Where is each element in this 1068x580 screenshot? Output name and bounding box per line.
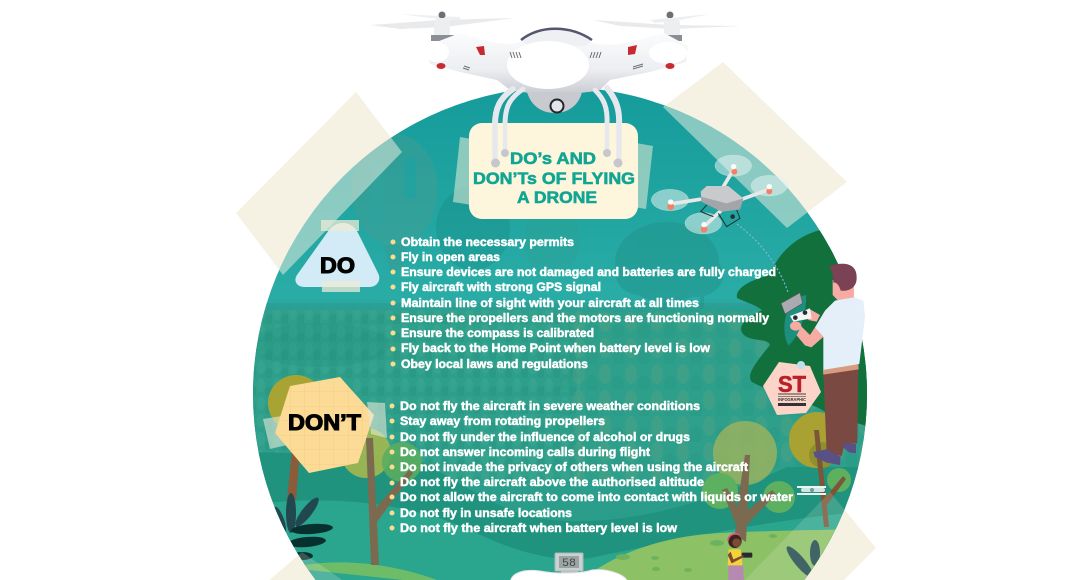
left propeller: [370, 12, 515, 41]
ST logo: ST: [778, 371, 806, 397]
grid: [275, 377, 374, 473]
shoes: [813, 443, 856, 465]
hill spots: [616, 534, 777, 572]
phone: [781, 293, 803, 314]
DON'T list: Do not fly the aircraft in severe weather conditions: [400, 399, 700, 413]
girl with controller: [728, 534, 752, 580]
trousers: [823, 365, 858, 456]
title: DO’s AND: [510, 149, 596, 168]
lower dark teal band: [250, 452, 880, 580]
leaf behind controller: [784, 295, 806, 345]
panel: title plate: [469, 123, 638, 219]
olive tree right: [789, 412, 851, 527]
canopy dark edge: [521, 29, 592, 40]
DON'T label: DON’T: [288, 410, 362, 435]
silhouette trees on horizon: [615, 222, 723, 310]
DON'T list: Do not answer incoming calls during flight: [400, 445, 650, 459]
INFOGRAPHIC label: INFOGRAPHIC: [778, 397, 807, 402]
neck and face: [833, 280, 854, 303]
hexagon: [763, 362, 821, 415]
hair: [829, 264, 857, 291]
screen panel: [559, 556, 579, 568]
DO list: Ensure the compass is calibrated: [401, 326, 594, 340]
horizon band: [264, 303, 762, 312]
light green tree left: [341, 428, 422, 565]
olive tree left: [268, 375, 314, 500]
DON'T list: [390, 399, 793, 535]
title: DON’Ts OF FLYING: [473, 169, 635, 188]
dark plant right: [786, 540, 820, 576]
DO list: Fly back to the Home Point when battery level is low: [401, 341, 711, 355]
icon: main drone: [370, 12, 742, 125]
DON'T list: Do not allow the aircraft to come into contact with liquids or water: [400, 490, 793, 504]
DON'T list: Do not invade the privacy of others when using the aircraft: [400, 460, 748, 474]
icon: flying drone: [651, 155, 788, 234]
body highlight: [507, 41, 589, 89]
pin: [797, 361, 805, 369]
olive-green tree centre right: [702, 421, 795, 542]
infographic canvas: [236, 12, 876, 580]
right tape: [367, 402, 387, 438]
hot air balloons: [352, 134, 510, 270]
rotors: [651, 155, 788, 234]
ST badge: [763, 361, 821, 415]
body: [701, 186, 743, 212]
DON'T list: Do not fly the aircraft above the authorised altitude: [400, 475, 704, 489]
DO list: Obtain the necessary permits: [401, 235, 574, 249]
lower light teal ground: [250, 500, 880, 580]
feet over plate: [491, 149, 622, 168]
DO badge: [295, 220, 379, 292]
tape top: [321, 220, 359, 231]
DO list: Fly aircraft with strong GPS signal: [401, 280, 601, 294]
legs: [701, 205, 740, 227]
sky and field gradient: [250, 85, 870, 580]
head: [728, 535, 742, 548]
remote: [742, 553, 752, 558]
trousers: [728, 565, 744, 580]
man with controller: [781, 264, 865, 465]
hexagon: [275, 377, 374, 473]
controller body: [510, 570, 628, 580]
tape bottom: [322, 281, 360, 292]
dome and lens: [527, 92, 582, 114]
stand: [561, 571, 578, 574]
icon: small drone over hill: [797, 486, 826, 495]
DO list: Fly in open areas: [401, 250, 500, 264]
DON'T badge: [263, 377, 387, 473]
title: [473, 149, 635, 207]
red lights: [436, 45, 674, 69]
vents: [463, 52, 643, 70]
left and right legs: [495, 88, 619, 125]
translucent tape over the circle: [236, 62, 876, 580]
dark plant left: [271, 493, 333, 560]
DO list: Maintain line of sight with your aircraft at all times: [401, 296, 699, 310]
right propeller: [593, 12, 742, 41]
ground controller: [510, 553, 628, 580]
DO list: Ensure devices are not damaged and batteries are fully charged: [401, 265, 776, 279]
left tape: [263, 416, 287, 449]
tape: outer parts behind the circle: [236, 62, 876, 580]
DO list: [390, 235, 776, 371]
right green hill: [596, 530, 836, 580]
shirt: [728, 549, 743, 565]
DO list: Ensure the propellers and the motors are functioning normally: [401, 311, 769, 325]
right arm: [792, 323, 827, 347]
hand: [790, 321, 801, 331]
canopy: [521, 29, 592, 46]
title: A DRONE: [517, 188, 597, 207]
triangle: [295, 223, 379, 287]
DON'T list: Do not fly the aircraft when battery level is low: [400, 521, 678, 535]
motor pods: [425, 42, 449, 62]
DON'T list: Do not fly under the influence of alcohol or drugs: [400, 430, 690, 444]
arms: [426, 33, 688, 94]
motors: [667, 169, 772, 233]
arms: [671, 170, 769, 227]
DO list: Obey local laws and regulations: [401, 357, 588, 371]
belt: [823, 364, 859, 375]
dotted flight line: [737, 224, 788, 292]
DON'T list: Do not fly in unsafe locations: [400, 506, 572, 520]
screen: [555, 553, 583, 571]
DON'T list: Stay away from rotating propellers: [400, 414, 605, 428]
big green bush behind man: [736, 230, 867, 426]
panel: circular scenic background: [236, 62, 880, 580]
headband: [728, 534, 739, 541]
tape behind title plate: [453, 137, 653, 209]
bullets: [390, 404, 394, 530]
arm: [728, 552, 743, 563]
screen reading: 58: [562, 558, 576, 570]
tulip field: [250, 310, 870, 480]
DO label: DO: [320, 253, 355, 278]
left green hill: [305, 562, 437, 580]
shirt: [815, 297, 865, 370]
hand on controller: [808, 308, 820, 322]
legs over plate: [495, 122, 619, 160]
bullets: [390, 240, 396, 366]
controller: [790, 308, 812, 322]
face: [732, 538, 741, 547]
